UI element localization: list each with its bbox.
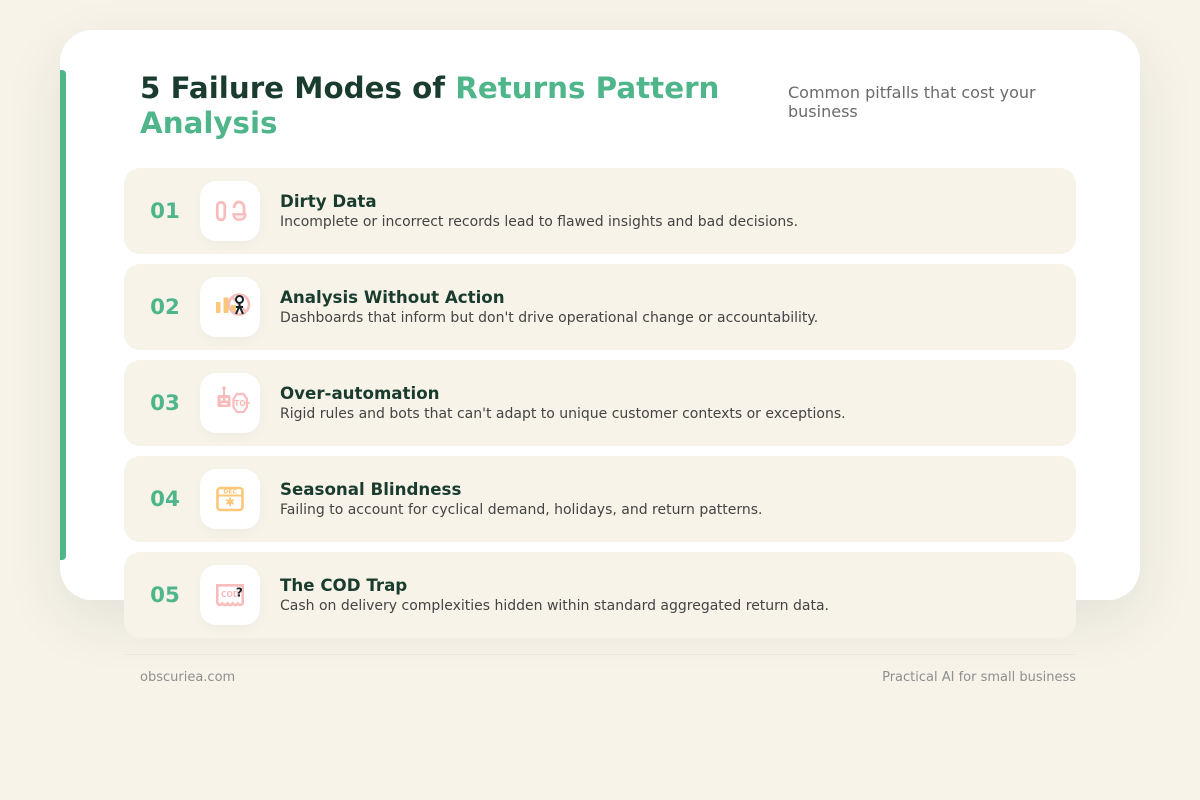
panel: failure mode 02 [124,264,1076,350]
subtitle: Common pitfalls that cost your business [788,83,1036,121]
number 02: 02 [150,295,180,320]
number 01: 01 [150,199,180,224]
heading: Analysis Without Action [280,288,505,307]
footer: tagline: Practical AI for small business [882,670,1076,685]
number 04: 04 [150,487,180,512]
heading: Seasonal Blindness [280,480,461,499]
footer: site: obscuriea.com [140,670,235,685]
icon: calendar [200,469,260,529]
heading: Dirty Data [280,192,377,211]
panel: failure mode 04 [124,456,1076,542]
icon: COD receipt: ? [236,586,243,600]
panel: failure mode 01 [124,168,1076,254]
panel: main card [60,30,1140,600]
heading: Over-automation [280,384,440,403]
description: Cash on delivery complexities hidden within standard aggregated return data. [280,598,829,614]
description: Dashboards that inform but don't drive operational change or accountability. [280,310,818,326]
title: 5 Failure Modes of Returns Pattern Analysis [140,70,719,140]
description: Rigid rules and bots that can't adapt to unique customer contexts or exceptions. [280,406,846,422]
description: Failing to account for cyclical demand, holidays, and return patterns. [280,502,763,518]
icon: robot and stop sign [200,373,260,433]
icon: dirty data [200,181,260,241]
number 03: 03 [150,391,180,416]
number 05: 05 [150,583,180,608]
heading: The COD Trap [280,576,407,595]
panel: failure mode 05 [124,552,1076,638]
icon: analysis without action [200,277,260,337]
icon: robot and stop sign: TO [234,399,246,408]
icon: COD receipt: COD [221,590,239,599]
icon: COD receipt [200,565,260,625]
accent bar [60,70,66,560]
icon: calendar: DEC [223,488,237,495]
panel: failure mode 03 [124,360,1076,446]
description: Incomplete or incorrect records lead to flawed insights and bad decisions. [280,214,798,230]
